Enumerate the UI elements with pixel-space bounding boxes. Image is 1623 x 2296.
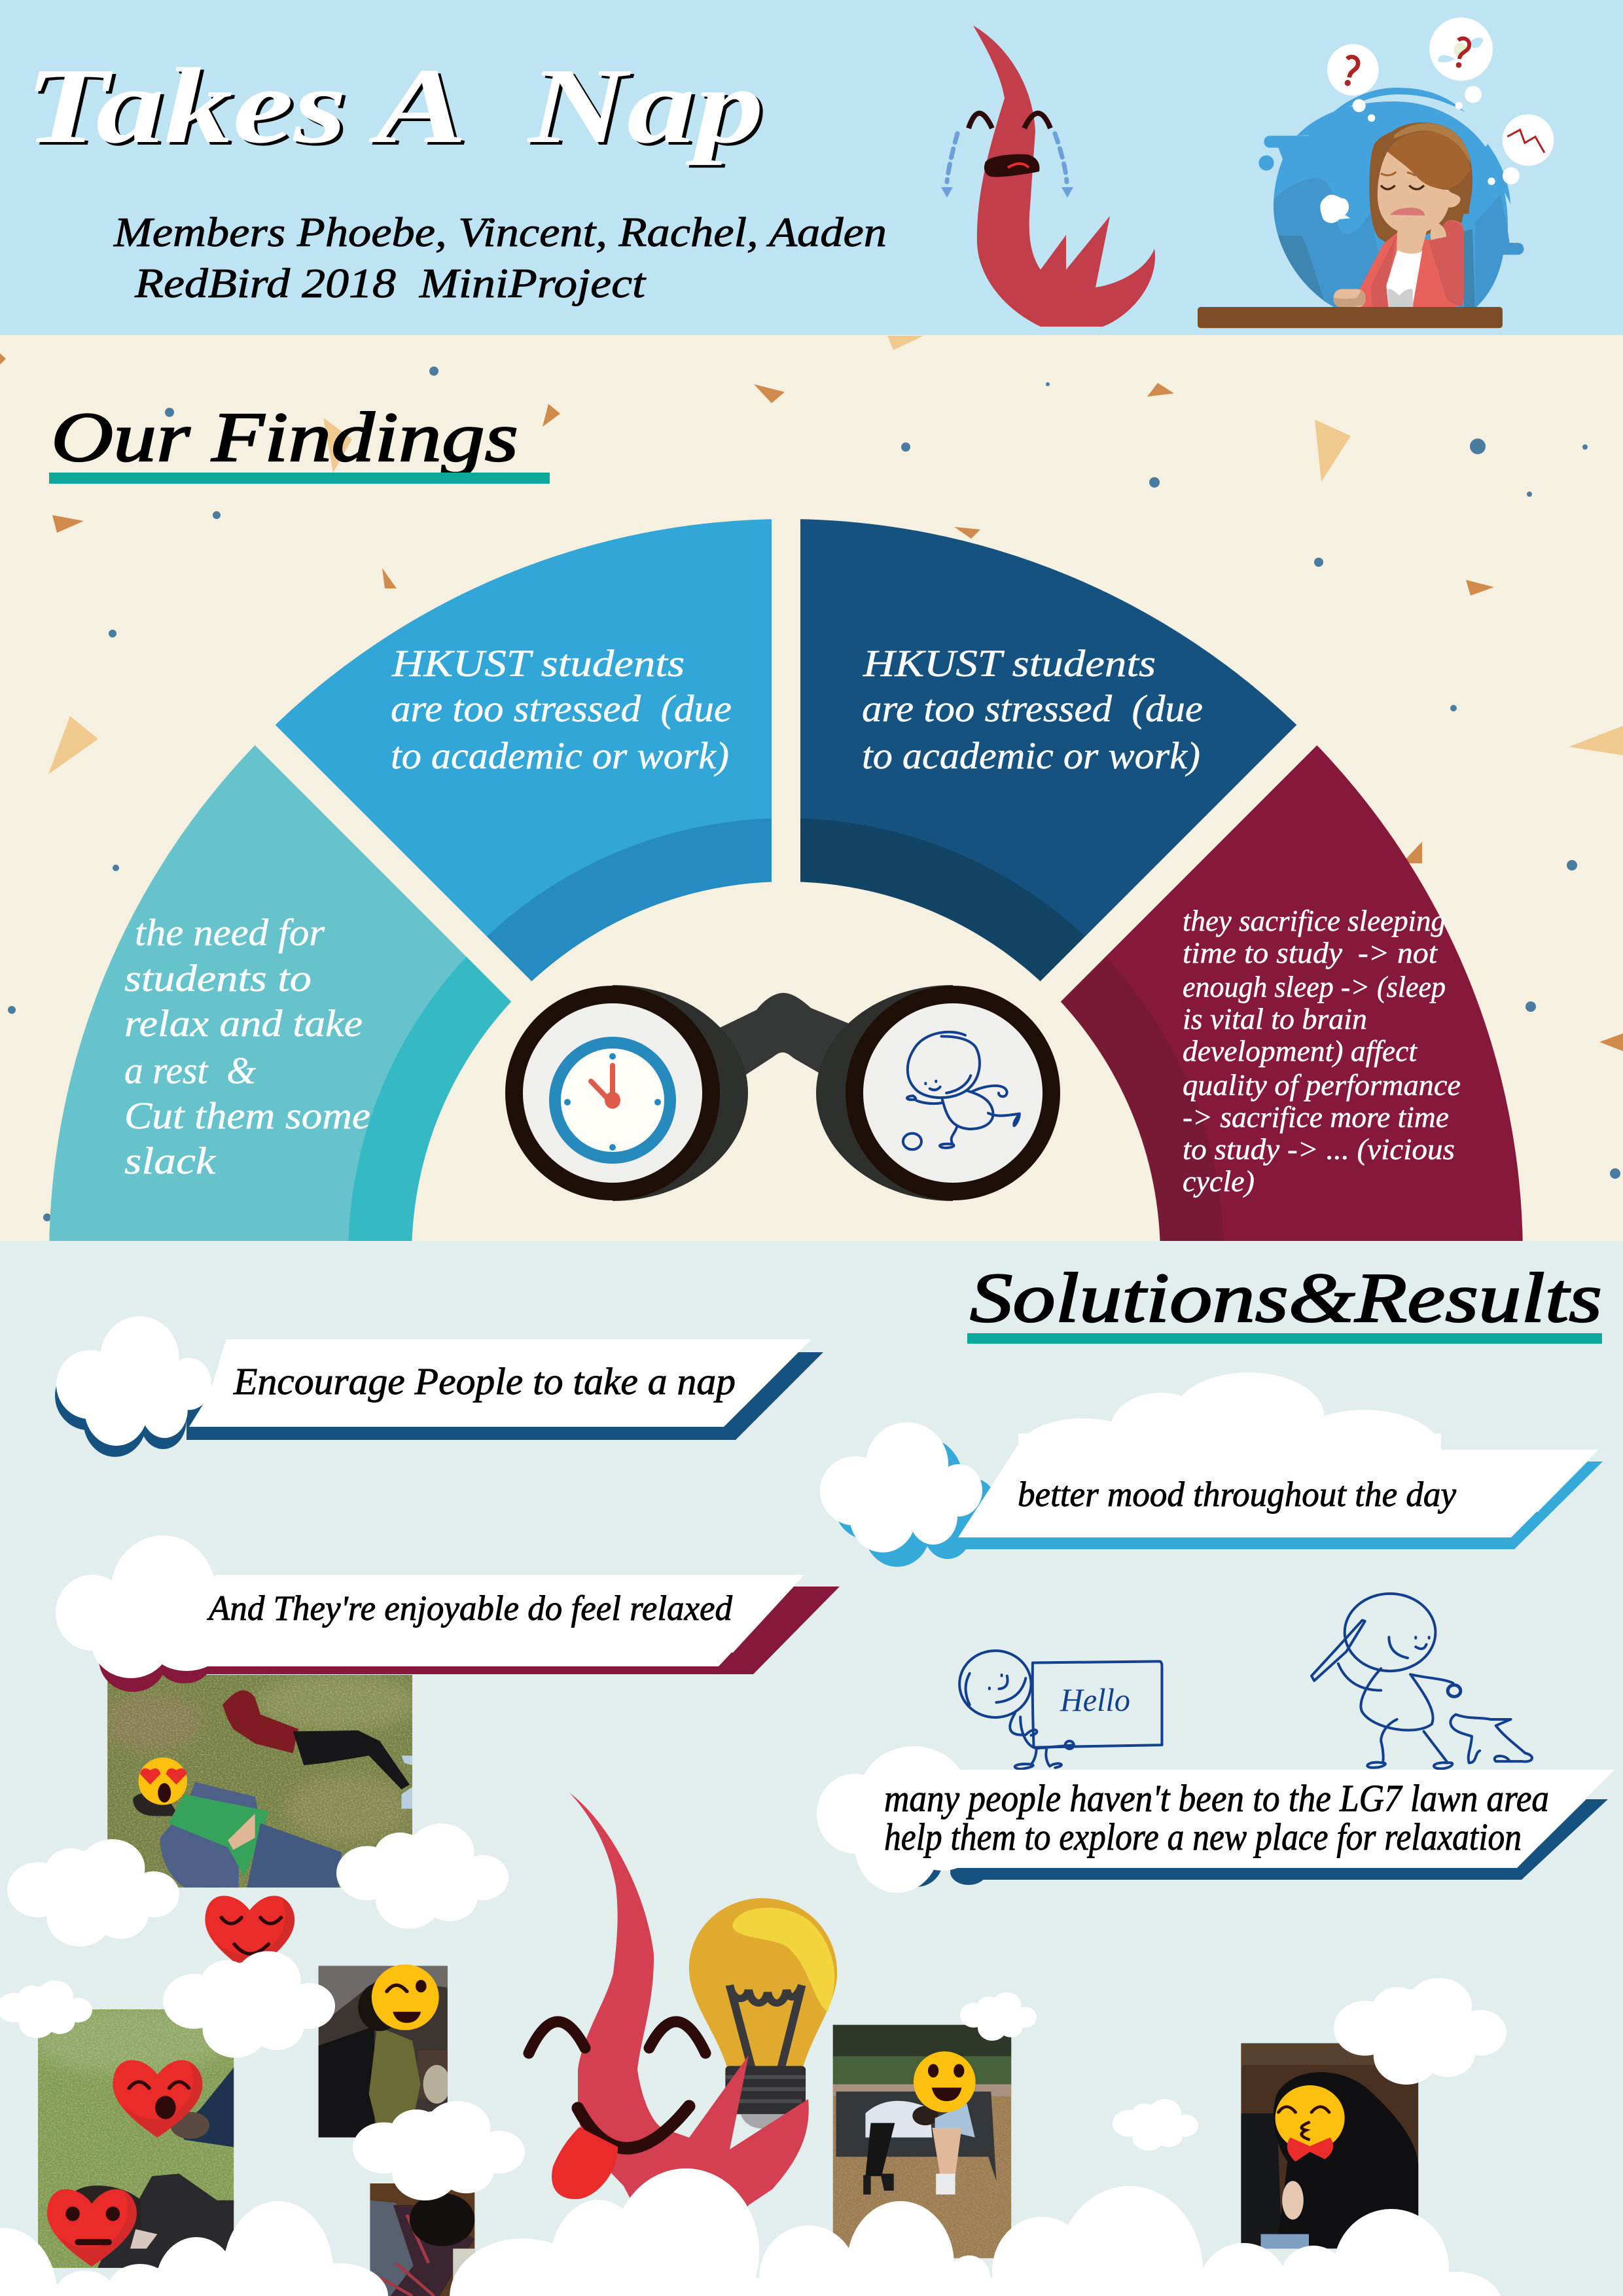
left glass — [523, 1003, 702, 1183]
text: navy segment: are too stressed (due — [862, 687, 1203, 730]
globe lower shade — [1278, 229, 1475, 308]
bars — [1264, 135, 1319, 159]
text: maroon segment: is vital to brain — [1183, 1002, 1367, 1035]
findings background — [0, 335, 1623, 1242]
text: teal segment: Cut them some — [124, 1094, 370, 1137]
left barrel — [613, 985, 748, 1201]
text: navy segment: HKUST students — [863, 642, 1156, 685]
right lens — [846, 986, 1060, 1200]
banner: explore lawn: help them to explore a new place for relaxation — [884, 1816, 1522, 1858]
shirt — [1386, 250, 1422, 307]
emoji: kiss with bow tie — [1275, 2085, 1345, 2162]
icon: light bulb — [689, 1898, 837, 2128]
jacket shade — [1371, 221, 1464, 307]
text: teal segment: slack — [124, 1139, 216, 1182]
icon: crying chili mascot — [941, 26, 1155, 327]
icon: stick figure with rabbit — [1311, 1594, 1532, 1768]
icon: stressed woman at desk — [1198, 18, 1554, 328]
text: navy segment: to academic or work) — [862, 734, 1200, 777]
banner: explore lawn: many people haven't been to the LG7 lawn area — [884, 1777, 1549, 1820]
emoji: wink — [372, 1964, 439, 2030]
swoosh — [1317, 88, 1465, 130]
text: maroon segment: -> sacrifice more time — [1183, 1100, 1449, 1134]
icon: happy chili mascot — [529, 1793, 809, 2245]
text: teal segment — [124, 911, 370, 1182]
clouds around photos — [0, 1823, 1507, 2200]
banner: better mood — [820, 1372, 1603, 1567]
right glass — [863, 1003, 1043, 1183]
photo: person with bag — [319, 1966, 450, 2138]
icon: stick figure with hello sign — [959, 1651, 1162, 1769]
text: blue segment: HKUST students — [391, 642, 685, 685]
text: blue segment — [391, 642, 732, 777]
right swoosh — [1472, 144, 1510, 205]
heading underline — [49, 473, 550, 484]
globe — [1274, 101, 1508, 308]
text: maroon segment: cycle) — [1183, 1164, 1255, 1198]
photo: two people on a bench — [833, 2025, 1011, 2258]
puff — [1320, 195, 1350, 223]
bottom cloud bank — [0, 2168, 1502, 2296]
text: teal segment: a rest & — [124, 1049, 256, 1092]
banner: encourage people — [55, 1316, 823, 1457]
icon: binoculars — [505, 985, 1060, 1201]
banner: better mood: better mood throughout the day — [1018, 1475, 1456, 1514]
emoji: heart eyes — [138, 1757, 187, 1805]
text: teal segment: relax and take — [124, 1002, 363, 1045]
text: teal segment: students to — [124, 957, 312, 999]
right barrel — [816, 985, 953, 1201]
right globe shade — [1475, 194, 1508, 308]
members line: Members Phoebe, Vincent, Rachel, Aaden — [113, 209, 887, 255]
project line: RedBird 2018 MiniProject — [134, 260, 647, 306]
text: maroon segment: to study -> ... (vicious — [1183, 1132, 1455, 1166]
heading: solutions and results: Solutions&Results — [970, 1259, 1602, 1337]
header background — [0, 0, 1623, 335]
text: blue segment: are too stressed (due — [391, 687, 732, 730]
banner: encourage people: Encourage People to take a nap — [233, 1360, 736, 1403]
solutions background — [0, 1241, 1623, 2296]
text: blue segment: to academic or work) — [391, 734, 729, 777]
hello label: Hello — [1060, 1681, 1130, 1718]
text: maroon segment: development) affect — [1183, 1034, 1418, 1067]
heart emoji: flat mouth — [47, 2189, 137, 2267]
emoji: smile — [914, 2051, 976, 2112]
left lens — [505, 986, 720, 1200]
bridge — [713, 993, 851, 1083]
icon: clock — [549, 1037, 676, 1164]
features — [1381, 172, 1425, 215]
heart emoji: closed eyes — [205, 1895, 294, 1973]
hands — [1334, 223, 1446, 308]
segment: stressed — [265, 519, 786, 1256]
chart: findings arc — [49, 504, 1523, 1630]
photo: person on grass — [33, 2007, 234, 2268]
text: navy segment — [862, 642, 1203, 777]
text: maroon segment: quality of performance — [1183, 1068, 1461, 1102]
photo: people lying on grass — [103, 1674, 418, 1888]
segment: stressed dark — [786, 519, 1307, 1256]
bubble contents — [1345, 37, 1544, 152]
heading underline — [967, 1333, 1602, 1344]
hair back — [1369, 122, 1472, 247]
inner circle and gaps — [252, 504, 1320, 1630]
photo: person at table — [370, 2183, 474, 2296]
heart emoji: kiss — [113, 2060, 202, 2138]
photo: person in black — [1241, 2043, 1418, 2249]
text: maroon segment: enough sleep -> (sleep — [1183, 970, 1446, 1003]
bubbles — [1327, 18, 1554, 185]
title: Takes A Nap — [25, 46, 764, 166]
globe shadow — [1274, 178, 1379, 308]
text: maroon segment — [1183, 904, 1461, 1198]
face — [1378, 152, 1461, 234]
icon: stick figure kicking — [903, 1032, 1020, 1149]
fringe — [1387, 132, 1471, 189]
hair top — [1394, 123, 1471, 164]
text: teal segment: the need for — [135, 911, 325, 954]
desk — [1198, 307, 1503, 328]
segment: need to relax — [49, 735, 786, 1256]
neck — [1397, 231, 1427, 254]
text: maroon segment: they sacrifice sleeping — [1183, 904, 1446, 937]
jacket — [1359, 220, 1464, 307]
confetti: triangles and dots — [0, 336, 1623, 1221]
text: maroon segment: time to study -> not — [1183, 936, 1438, 969]
banner: enjoyable and relaxed — [56, 1535, 840, 1692]
segment: sacrifice sleep — [786, 735, 1523, 1256]
banner: enjoyable and relaxed: And They're enjoyable do feel relaxed — [207, 1588, 733, 1628]
banner: explore lawn — [817, 1746, 1614, 1893]
heading: our findings: Our Findings — [51, 399, 518, 476]
